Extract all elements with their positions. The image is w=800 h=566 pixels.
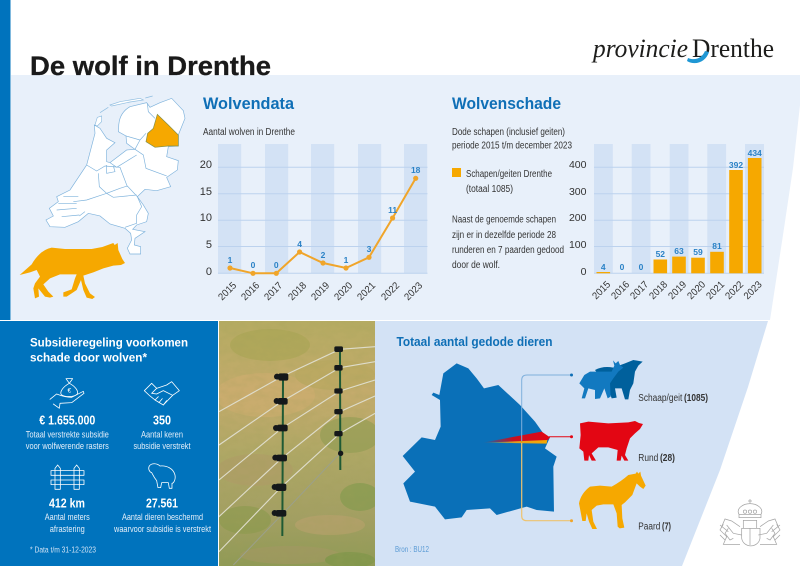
legend: (totaal 1085)	[466, 184, 513, 195]
bar chart: 2021	[704, 279, 727, 302]
note text: Naast de genoemde schapen	[452, 214, 556, 226]
icon: coat of arms	[720, 499, 780, 546]
line chart: 20	[200, 159, 212, 171]
panel heading: schade door wolven*	[30, 350, 147, 364]
icon: money bag in hand	[50, 379, 84, 408]
stat: 350: subsidie verstrekt	[134, 441, 191, 452]
icon: sheep	[149, 464, 175, 488]
bar chart: 2017	[628, 279, 651, 302]
bar chart: 0	[581, 266, 587, 278]
panel: Wolvendata	[200, 94, 428, 303]
title: De wolf in Drenthe	[30, 51, 271, 81]
note text: runderen en 7 paarden gedood	[452, 245, 564, 256]
source note: Bron : BU12	[395, 545, 429, 554]
line chart: 2020	[332, 280, 355, 303]
bar chart: 2020	[685, 279, 708, 302]
line chart: 2017	[262, 280, 285, 303]
line chart: 2015	[216, 280, 239, 303]
bar chart: 300	[569, 186, 587, 198]
line chart: 0	[274, 260, 279, 270]
label: Rund: (28)	[660, 453, 675, 464]
stat: € 1.655.000: Totaal verstrekte subsidie	[26, 430, 109, 440]
panel heading	[30, 336, 188, 364]
heading: Wolvendata	[203, 94, 295, 113]
arrow: orange connector	[522, 443, 573, 522]
note text: door de wolf.	[452, 260, 500, 271]
bar chart: 2016	[609, 279, 632, 302]
label: Rund	[638, 453, 675, 464]
bar chart: 81	[712, 241, 722, 251]
arrow: blue connector	[522, 374, 573, 441]
stat: € 1.655.000	[26, 412, 109, 452]
line chart: 11	[388, 205, 397, 215]
logo: provincie Drenthe	[591, 34, 774, 63]
panel heading: Totaal aantal gedode dieren	[396, 335, 552, 349]
photo: electric wolf fence in a meadow	[215, 321, 380, 566]
line chart: 2016	[239, 280, 262, 303]
chart subtitle: Dode schapen (inclusief geiten)	[452, 127, 565, 138]
chart subtitle: Aantal wolven in Drenthe	[203, 127, 295, 138]
heading: Wolvenschade	[452, 94, 561, 113]
bar chart: 4	[601, 262, 606, 272]
line chart: 15	[200, 186, 212, 198]
stat: 412 km	[45, 496, 90, 535]
line chart	[200, 144, 428, 303]
label: Rund: Rund	[638, 453, 658, 464]
bar chart: 100	[569, 239, 587, 251]
bar chart: 392	[729, 160, 743, 170]
panel heading: Subsidieregeling voorkomen	[30, 336, 188, 350]
label: Schaap/geit: Schaap/geit	[638, 393, 682, 404]
chart subtitle: periode 2015 t/m december 2023	[452, 140, 572, 152]
stat: 27.561: 27.561	[146, 496, 178, 510]
stat: 412 km: afrastering	[50, 524, 85, 535]
bar chart: 52	[656, 249, 665, 259]
line chart: 0	[251, 260, 256, 270]
bar chart: 0	[620, 262, 625, 272]
stat: € 1.655.000: € 1.655.000	[39, 412, 95, 428]
line chart: 1	[228, 255, 233, 265]
line chart: 0	[206, 266, 212, 278]
stat: 27.561	[113, 496, 211, 535]
icon: money bag in hand: €	[67, 388, 71, 395]
logo: provincie Drenthe: provincie	[591, 34, 688, 63]
icon: sheep and goat	[579, 360, 643, 399]
chart subtitle	[452, 127, 572, 152]
icon: fence	[51, 465, 84, 489]
stat: € 1.655.000: voor wolfwerende rasters	[26, 441, 109, 452]
map of Drenthe with wedge	[403, 363, 557, 519]
stat: 412 km: 412 km	[49, 496, 85, 510]
line chart: 5	[206, 239, 212, 251]
line chart: 2023	[402, 280, 425, 303]
line chart: 18	[411, 165, 421, 175]
stat: 27.561: waarvoor subsidie is verstrekt	[113, 524, 211, 535]
bar chart: 59	[693, 247, 703, 257]
footnote: * Data t/m 31-12-2023	[30, 546, 96, 554]
panel: Totaal aantal gedode dieren	[375, 321, 768, 566]
stat: 350: 350	[153, 412, 171, 428]
line chart: 2	[321, 250, 326, 260]
map of the Netherlands with Drenthe highlighted	[46, 96, 185, 254]
line chart: 2021	[355, 280, 378, 303]
icon: handshake	[144, 382, 179, 405]
bar chart: 2015	[590, 279, 613, 302]
stat: 350	[134, 412, 191, 452]
stat: 350: Aantal keren	[141, 430, 183, 440]
label: Paard: (7)	[662, 522, 671, 532]
bar chart: 0	[639, 262, 644, 272]
bar chart: 200	[569, 212, 587, 224]
left blue strip	[0, 0, 10, 320]
icon: horse	[579, 472, 646, 529]
legend	[452, 168, 552, 195]
line chart: 4	[297, 239, 302, 249]
bar chart: 63	[674, 246, 684, 256]
stat: 27.561: Aantal dieren beschermd	[122, 512, 203, 523]
background panel: upper light blue area	[11, 75, 800, 320]
line chart: 3	[367, 244, 372, 254]
logo: provincie Drenthe: Drenthe	[692, 34, 774, 63]
line chart: 1	[344, 255, 349, 265]
label: Paard: Paard	[638, 522, 660, 532]
bar chart: 2023	[742, 279, 765, 302]
icon: cow	[579, 421, 643, 461]
line chart: 10	[200, 212, 212, 224]
bar chart: 434	[748, 148, 762, 158]
line chart: 2019	[309, 280, 332, 303]
stat: 412 km: Aantal meters	[45, 512, 90, 523]
note text: zijn er in dezelfde periode 28	[452, 230, 556, 241]
legend: Schapen/geiten Drenthe	[466, 169, 552, 180]
bar chart: 2022	[723, 279, 746, 302]
line chart: 2022	[379, 280, 402, 303]
arrow: red connector	[549, 435, 573, 438]
line chart: 2018	[286, 280, 309, 303]
bar chart	[569, 144, 765, 302]
note text	[452, 214, 564, 271]
icon: orange wolf	[20, 243, 125, 299]
panel: Subsidieregeling	[0, 321, 218, 566]
panel: Wolvenschade	[452, 94, 765, 302]
bar chart: 400	[569, 159, 587, 171]
bar chart: 2019	[666, 279, 689, 302]
bar chart: 2018	[647, 279, 670, 302]
label: Schaap/geit: (1085)	[684, 393, 708, 404]
